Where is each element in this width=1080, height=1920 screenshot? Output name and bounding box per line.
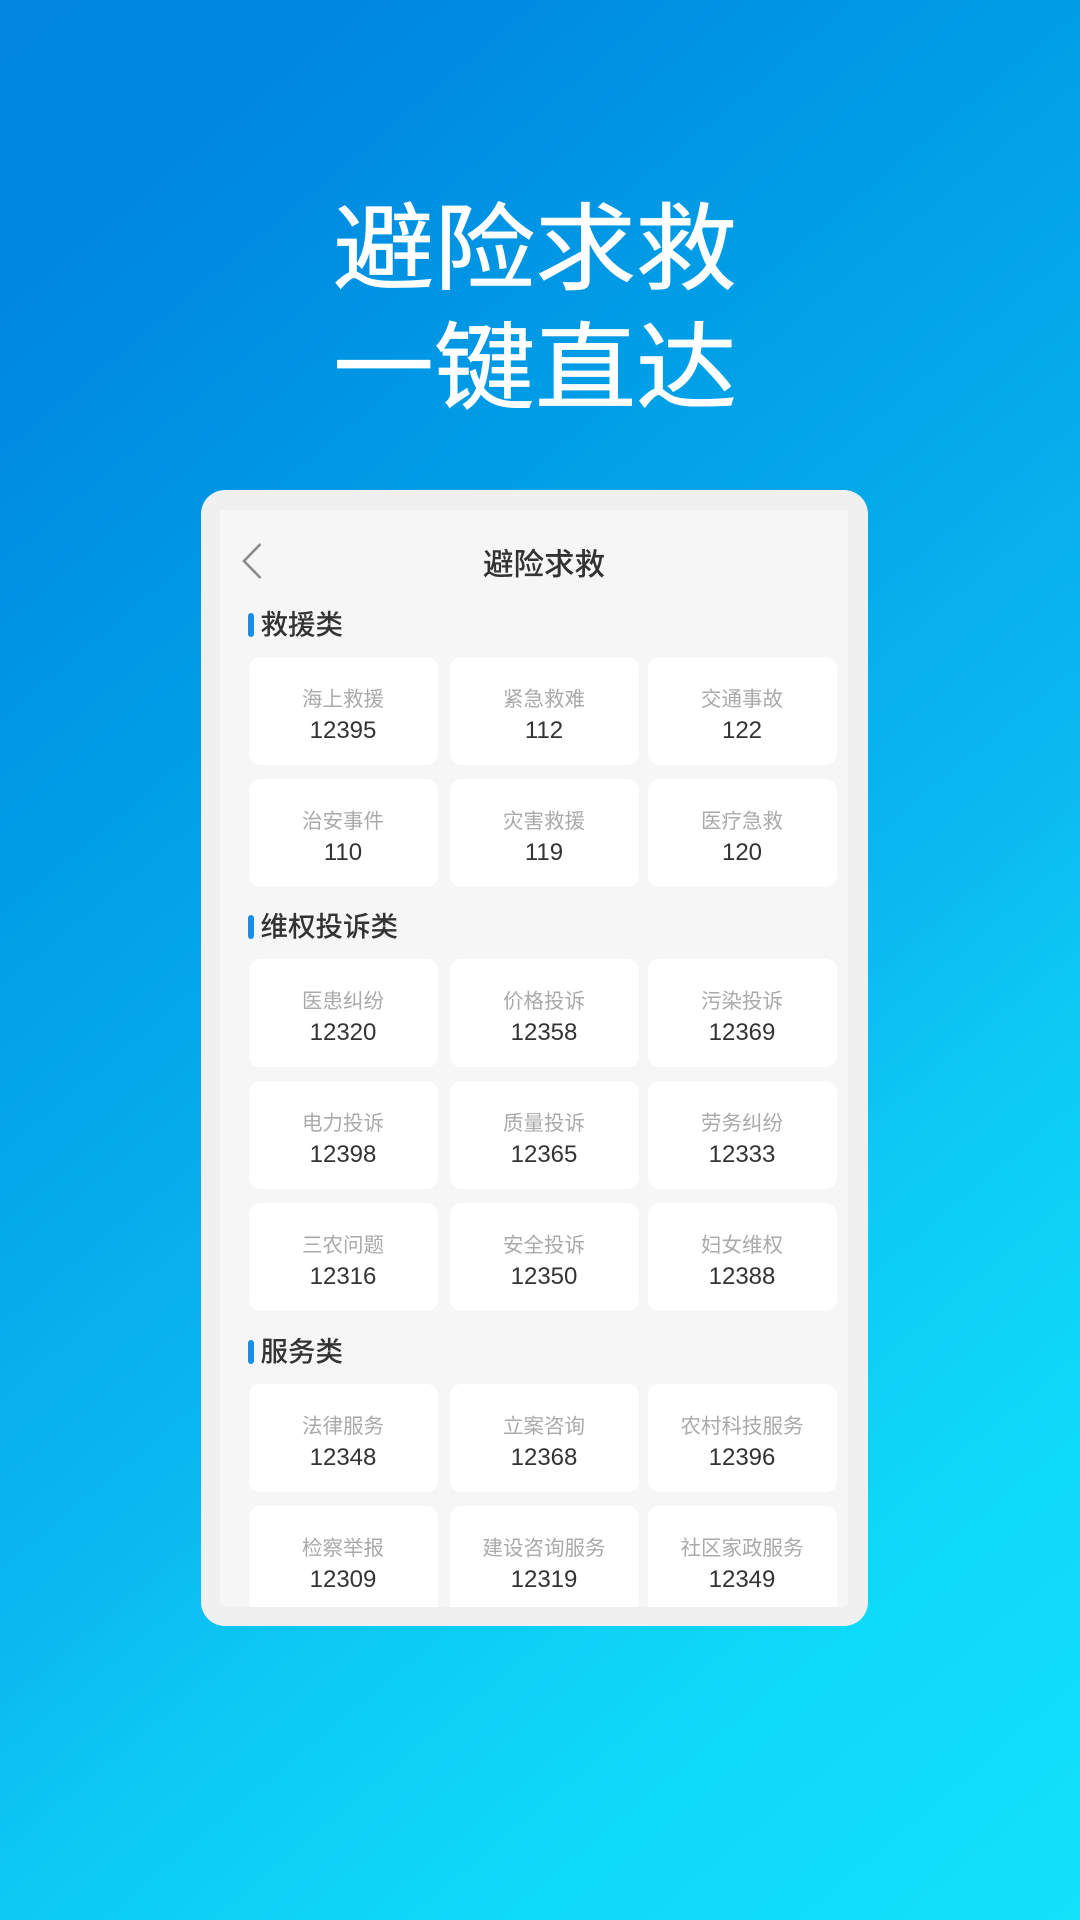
card: 社区家政服务: 12349 [709, 1566, 775, 1592]
card: 电力投诉: 电力投诉 [302, 1112, 384, 1134]
card: 检察举报: 12309 [310, 1566, 376, 1592]
card: 妇女维权: 12388 [709, 1262, 775, 1290]
card: 妇女维权 [648, 1203, 837, 1311]
card: 紧急救难: 紧急救难 [503, 688, 585, 710]
card: 海上救援: 海上救援 [302, 688, 384, 710]
card: 医疗急救 [648, 779, 837, 887]
card: 医疗急救: 120 [722, 838, 762, 866]
card: 紧急救难: 112 [525, 716, 563, 744]
card: 治安事件: 治安事件 [302, 810, 384, 832]
card: 立案咨询: 立案咨询 [503, 1414, 585, 1438]
card: 劳务纠纷 [648, 1081, 837, 1189]
card: 质量投诉: 质量投诉 [503, 1112, 585, 1134]
card: 法律服务: 12348 [310, 1444, 376, 1470]
card: 建设咨询服务 [450, 1506, 639, 1614]
card: 灾害救援: 119 [525, 838, 563, 866]
card: 治安事件: 110 [324, 838, 362, 866]
panel: phone screenshot frame [201, 490, 868, 1626]
card: 价格投诉: 价格投诉 [503, 990, 585, 1012]
card: 污染投诉: 污染投诉 [701, 990, 783, 1012]
card: 灾害救援 [450, 779, 639, 887]
card: 紧急救难 [450, 657, 639, 765]
heading: rescue: 救援类 [260, 609, 343, 640]
card: 安全投诉 [450, 1203, 639, 1311]
card: 社区家政服务: 社区家政服务 [680, 1536, 804, 1560]
card: 价格投诉 [450, 959, 639, 1067]
card: 妇女维权: 妇女维权 [701, 1234, 783, 1256]
screen title: 避险求救 [483, 548, 605, 582]
card: 污染投诉 [648, 959, 837, 1067]
card: 污染投诉: 12369 [709, 1018, 775, 1046]
title line 2: 一键直达 [333, 316, 737, 422]
card: 建设咨询服务: 建设咨询服务 [482, 1536, 606, 1560]
card: 三农问题: 三农问题 [302, 1234, 384, 1256]
card: 农村科技服务: 农村科技服务 [680, 1414, 804, 1438]
heading: services: 服务类 [260, 1336, 343, 1367]
card: 三农问题: 12316 [310, 1262, 376, 1290]
card: 交通事故: 交通事故 [701, 688, 783, 710]
card: 立案咨询: 12368 [511, 1444, 577, 1470]
card: 法律服务 [249, 1384, 438, 1492]
card: 医患纠纷: 12320 [310, 1018, 376, 1046]
card: 海上救援: 12395 [310, 716, 376, 744]
card: 医疗急救: 医疗急救 [701, 810, 783, 832]
card: 社区家政服务 [648, 1506, 837, 1614]
card: 交通事故: 122 [722, 716, 762, 744]
card: 电力投诉 [249, 1081, 438, 1189]
card: 三农问题 [249, 1203, 438, 1311]
card: 农村科技服务 [648, 1384, 837, 1492]
panel: app screen [220, 510, 848, 1607]
card: 劳务纠纷: 劳务纠纷 [701, 1112, 783, 1134]
card: 法律服务: 法律服务 [302, 1414, 384, 1438]
card: 治安事件 [249, 779, 438, 887]
card: 海上救援 [249, 657, 438, 765]
card: 电力投诉: 12398 [310, 1140, 376, 1168]
icon: back chevron [242, 543, 262, 579]
card: 检察举报: 检察举报 [302, 1536, 384, 1560]
title line 1: 避险求救 [333, 197, 737, 303]
card: 质量投诉: 12365 [511, 1140, 577, 1168]
card: 农村科技服务: 12396 [709, 1444, 775, 1470]
card: 立案咨询 [450, 1384, 639, 1492]
card: 劳务纠纷: 12333 [709, 1140, 775, 1168]
card: 检察举报 [249, 1506, 438, 1614]
card: 医患纠纷: 医患纠纷 [302, 990, 384, 1012]
card: 建设咨询服务: 12319 [511, 1566, 577, 1592]
card: 医患纠纷 [249, 959, 438, 1067]
card: 价格投诉: 12358 [511, 1018, 577, 1046]
card: 安全投诉: 安全投诉 [503, 1234, 585, 1256]
heading: rights complaints: 维权投诉类 [260, 911, 398, 942]
card: 灾害救援: 灾害救援 [503, 810, 585, 832]
card: 安全投诉: 12350 [511, 1262, 577, 1290]
card: 交通事故 [648, 657, 837, 765]
card: 质量投诉 [450, 1081, 639, 1189]
